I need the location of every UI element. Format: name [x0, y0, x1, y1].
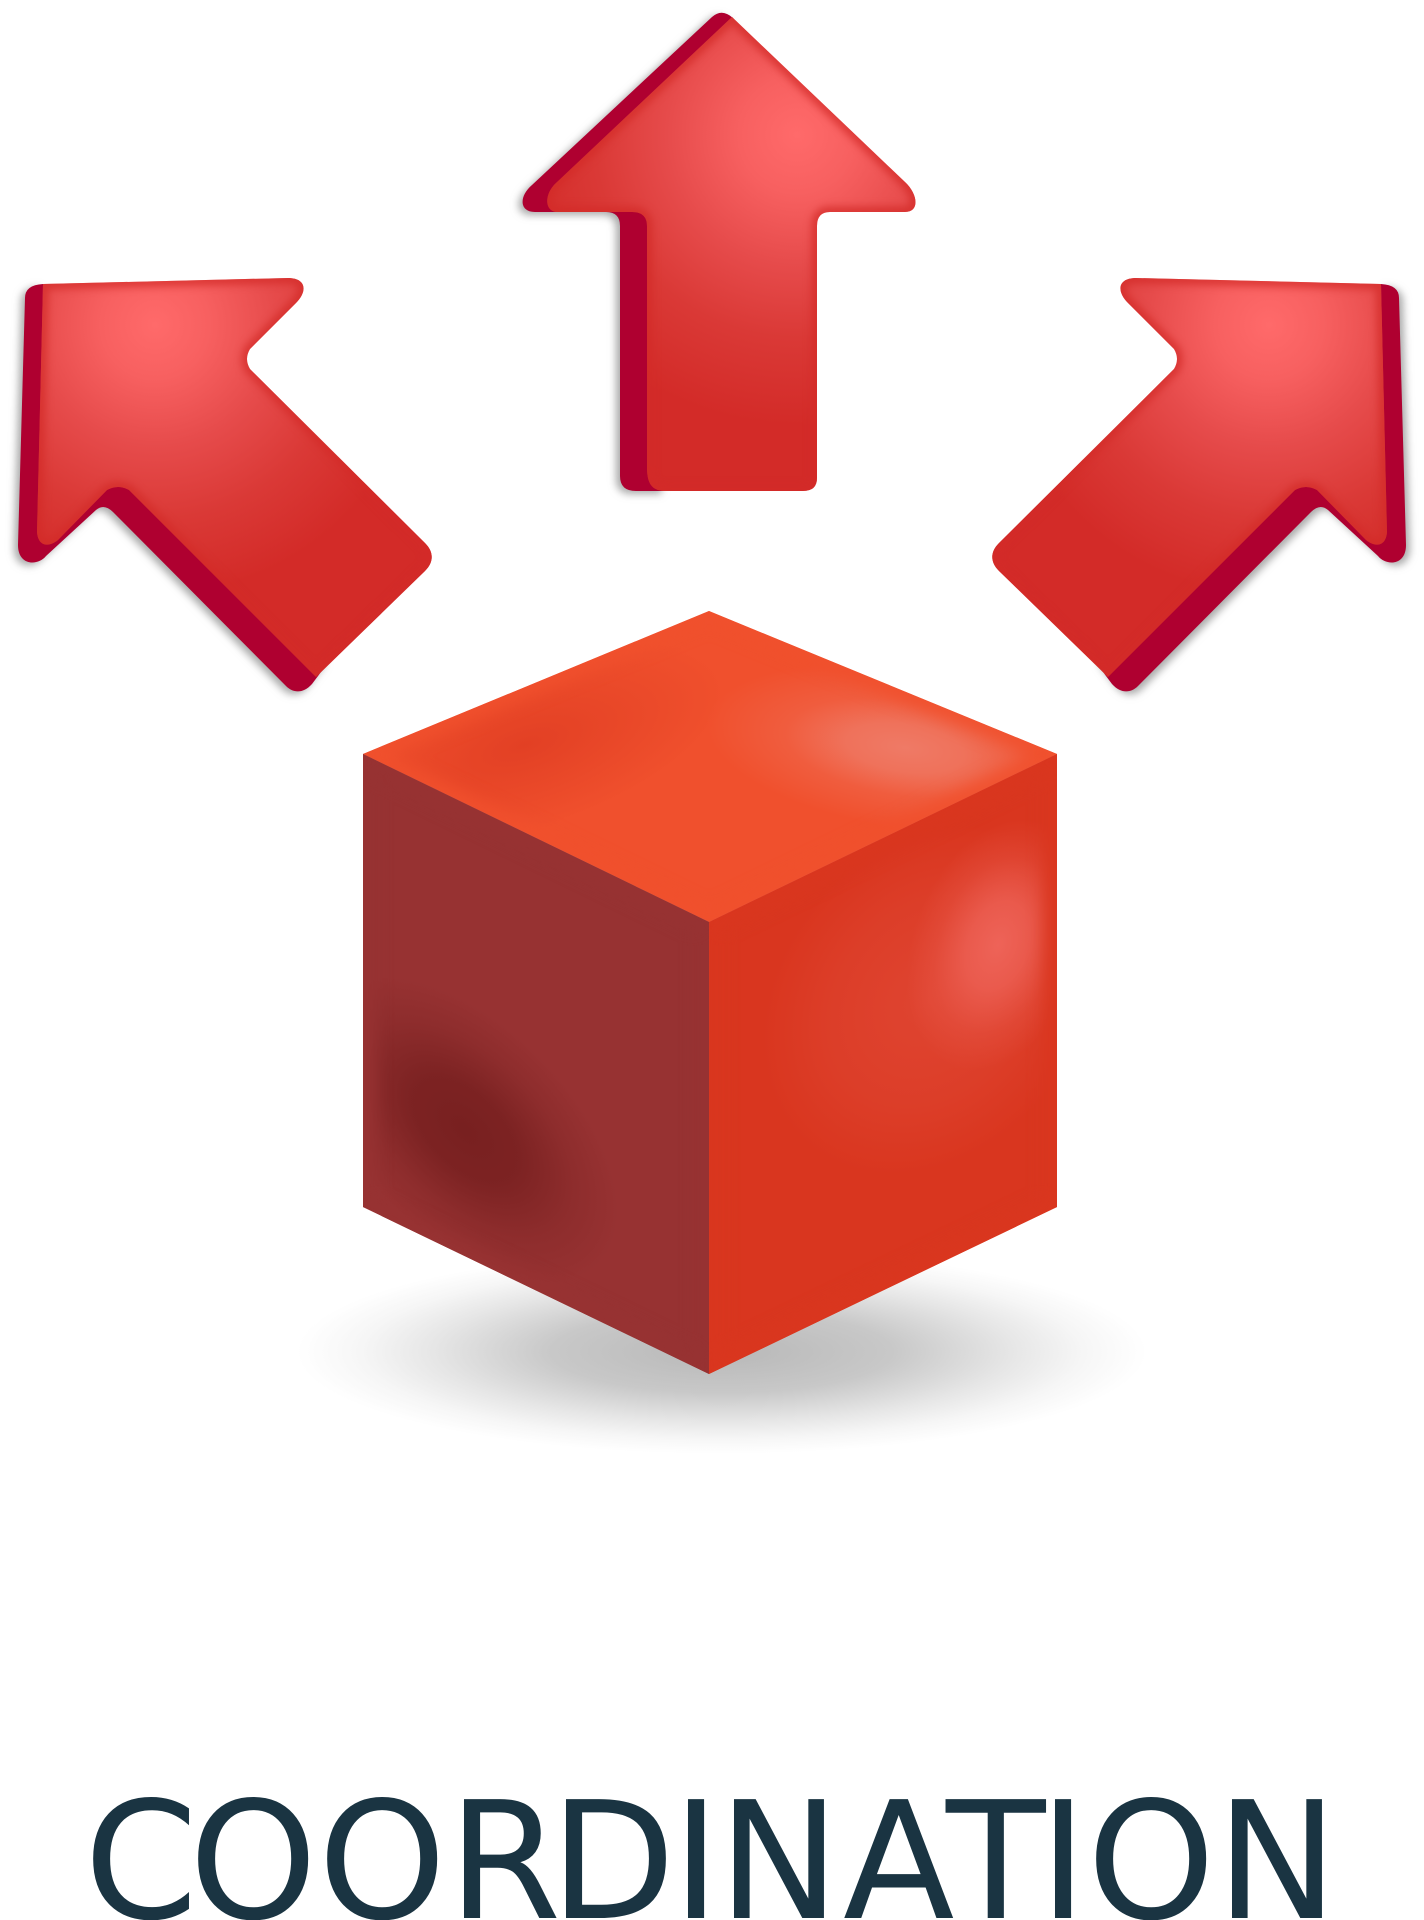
cube right face — [709, 754, 1057, 1374]
arrow: up — [514, 12, 916, 499]
cube left face — [363, 754, 709, 1374]
cube — [363, 611, 1057, 1374]
arrow: up-right — [974, 260, 1406, 691]
arrow: up-left — [18, 260, 450, 691]
cube shadow — [297, 1250, 1147, 1454]
cube top face — [363, 611, 1057, 922]
